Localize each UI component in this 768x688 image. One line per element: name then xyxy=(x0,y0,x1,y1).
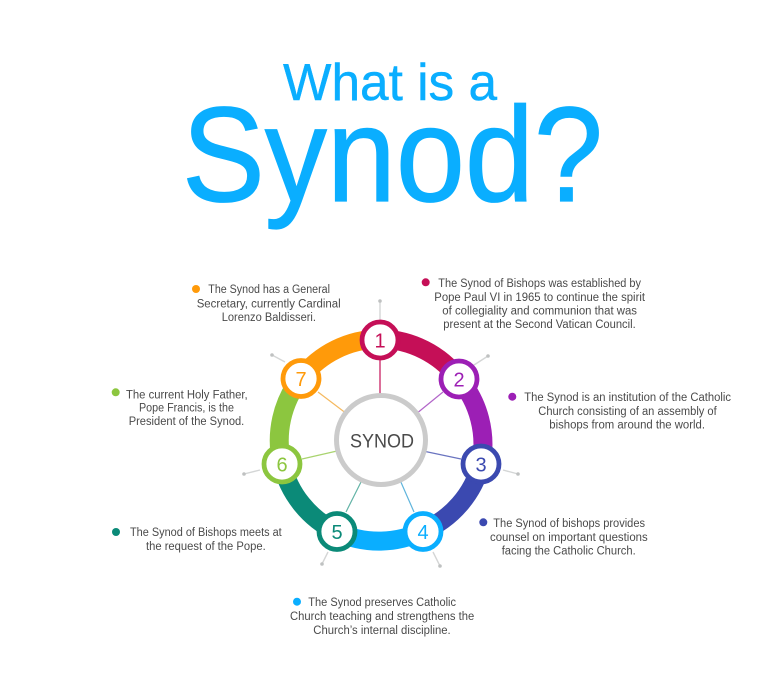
node 5 xyxy=(319,514,355,550)
node 4: 4 xyxy=(417,522,429,544)
callout 6: Pope Francis, is the xyxy=(139,403,234,415)
callout 5: The Synod of Bishops meets at xyxy=(130,527,282,539)
callout 7: The Synod has a General xyxy=(208,284,330,296)
callout 6: President of the Synod. xyxy=(129,416,244,428)
callout 1: of collegiality and communion that was xyxy=(442,306,637,318)
node 1 xyxy=(362,322,398,358)
ring segments xyxy=(279,339,483,541)
callout 3: The Synod of bishops provides xyxy=(493,518,645,530)
inner spokes xyxy=(302,360,461,512)
node 7: 7 xyxy=(295,369,307,391)
callout 3 xyxy=(479,518,648,558)
callout 6: The current Holy Father, xyxy=(126,389,248,401)
callout 3: facing the Catholic Church. xyxy=(502,546,636,558)
node 5: 5 xyxy=(331,522,343,544)
node 6: 6 xyxy=(276,454,288,476)
node 7 xyxy=(283,360,319,396)
diagram: synod wheel xyxy=(242,299,520,568)
callout 2 xyxy=(508,392,731,432)
node 1: 1 xyxy=(374,330,386,352)
callout 1 xyxy=(422,278,646,331)
node 6 xyxy=(264,446,300,482)
callout 5 xyxy=(112,527,282,553)
center circle: SYNOD xyxy=(350,430,414,452)
callout 4 xyxy=(290,597,474,637)
callout 1: Pope Paul VI in 1965 to continue the spirit xyxy=(434,292,646,304)
callout 7: Secretary, currently Cardinal xyxy=(197,298,341,310)
node 3 xyxy=(463,446,499,482)
callout 5: the request of the Pope. xyxy=(146,541,266,553)
callout 2: Church consisting of an assembly of xyxy=(538,406,717,418)
node 4 xyxy=(405,514,441,550)
callout 4: Church’s internal discipline. xyxy=(313,625,451,637)
callout 7: Lorenzo Baldisseri. xyxy=(222,312,316,324)
outer grey spokes xyxy=(242,299,520,568)
title: What is a xyxy=(283,54,497,112)
callout 7 xyxy=(192,284,341,324)
callout 2: The Synod is an institution of the Catholic xyxy=(524,392,731,404)
title: Synod? xyxy=(182,79,603,230)
callout 1: The Synod of Bishops was established by xyxy=(438,278,641,290)
callout 3: counsel on important questions xyxy=(490,532,648,544)
node 3: 3 xyxy=(475,454,487,476)
callout 6 xyxy=(112,388,248,428)
callout 4: The Synod preserves Catholic xyxy=(308,597,456,609)
node 2: 2 xyxy=(453,370,465,392)
callout 2: bishops from around the world. xyxy=(549,420,705,432)
callout 1: present at the Second Vatican Council. xyxy=(443,319,636,331)
callout 4: Church teaching and strengthens the xyxy=(290,611,474,623)
center circle xyxy=(336,396,426,484)
node 2 xyxy=(441,361,477,397)
